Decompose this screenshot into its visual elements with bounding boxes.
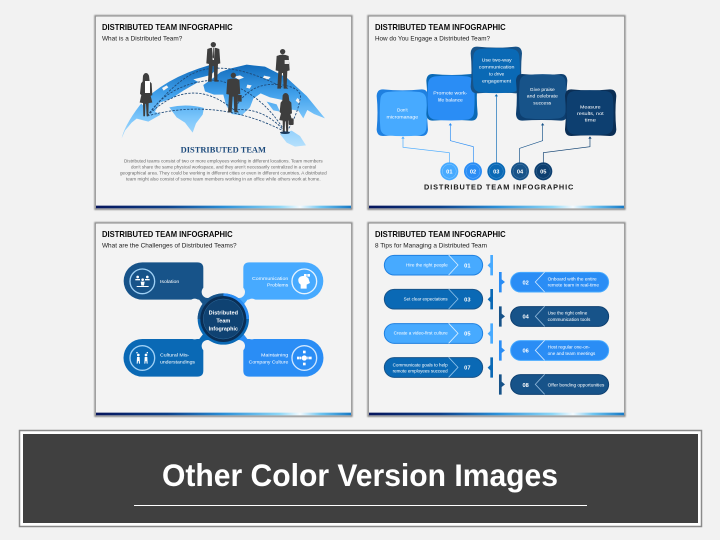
tip 08 bbox=[499, 374, 609, 395]
tip 05: Create a video-first culture bbox=[394, 331, 448, 336]
card 2: Promote work- bbox=[433, 90, 468, 95]
tip 07: remote employees succeed bbox=[393, 369, 448, 374]
bottom label: DISTRIBUTED TEAM INFOGRAPHIC bbox=[424, 183, 574, 192]
card 3: to drive bbox=[489, 71, 505, 76]
tip 03: Set clear expectations bbox=[404, 297, 448, 302]
card 2 bbox=[426, 74, 478, 121]
tip 06: one and team meetings bbox=[548, 351, 596, 356]
dashed connection arcs bbox=[147, 68, 300, 132]
tip 01: Hire the right people bbox=[406, 263, 448, 268]
card 4: and celebrate bbox=[527, 94, 558, 99]
centre hub bbox=[198, 293, 249, 345]
petal: maintaining company culture: Company Culture bbox=[249, 359, 289, 364]
tip 04: Use the right online bbox=[548, 311, 588, 316]
card 3: Use two-way bbox=[482, 58, 512, 63]
tip 06 bbox=[499, 340, 609, 361]
card 5: Measure bbox=[580, 104, 601, 109]
subheading: How do You Engage a Distributed Team? bbox=[375, 36, 490, 43]
description text: don't share the same physical workspace, and they aren't necessarily centralized in a central bbox=[131, 165, 316, 170]
banner: other color version images: Other Color Version Images bbox=[162, 457, 558, 493]
petal: isolation bbox=[124, 262, 227, 325]
tip 04: communication tools bbox=[548, 317, 591, 322]
tip 05: 05 bbox=[464, 332, 470, 338]
card 3 bbox=[471, 47, 522, 93]
number badges: 03 bbox=[493, 169, 499, 175]
petal: communication problems bbox=[220, 262, 323, 325]
tip 07: 07 bbox=[464, 366, 470, 372]
panel: how do you engage bbox=[368, 16, 625, 209]
tip 02: remote team in real-time bbox=[548, 283, 599, 288]
panel: challenges bbox=[95, 223, 352, 416]
card 2: life balance bbox=[438, 97, 463, 102]
heading: DISTRIBUTED TEAM INFOGRAPHIC bbox=[102, 22, 233, 32]
tip 08: Offer bonding opportunities bbox=[548, 382, 605, 387]
number badges bbox=[440, 162, 552, 180]
banner: other color version images bbox=[20, 430, 702, 526]
card 5 bbox=[565, 89, 616, 136]
petal: maintaining company culture: Maintaining bbox=[261, 353, 289, 358]
heading: DISTRIBUTED TEAM INFOGRAPHIC bbox=[375, 229, 506, 239]
subheading: What is a Distributed Team? bbox=[102, 36, 183, 43]
description text: geographical area. They could be working in different cities or even in different countries. A distributed bbox=[120, 171, 327, 176]
tip 02: 02 bbox=[523, 280, 529, 286]
number badges: 05 bbox=[540, 169, 546, 175]
number badges: 04 bbox=[517, 169, 524, 175]
description text bbox=[120, 159, 327, 182]
tip 06: 06 bbox=[523, 349, 529, 355]
petal: isolation: Isolation bbox=[160, 279, 180, 284]
heading: DISTRIBUTED TEAM INFOGRAPHIC bbox=[102, 229, 233, 239]
subheading: What are the Challenges of Distributed Teams? bbox=[102, 243, 237, 250]
panel: what is a distributed team bbox=[95, 16, 352, 209]
tip 07 bbox=[384, 357, 493, 378]
tip 04 bbox=[499, 306, 609, 327]
number badges: 02 bbox=[470, 169, 476, 175]
petal: cultural misunderstandings bbox=[123, 315, 227, 377]
tip 05 bbox=[384, 323, 493, 344]
centre hub: Team bbox=[216, 318, 230, 324]
card 1: micromanage bbox=[386, 115, 419, 120]
tip 03: 03 bbox=[464, 297, 470, 303]
card 1 bbox=[377, 89, 428, 136]
tip 06: Host regular one-on- bbox=[548, 345, 590, 350]
card 4: Give praise bbox=[530, 87, 555, 92]
description text: team might also consist of some team members working in an office while others work at home. bbox=[126, 177, 321, 182]
card 3: communication bbox=[479, 65, 515, 70]
petal: communication problems: Communication bbox=[252, 276, 289, 281]
card 4 bbox=[516, 74, 567, 121]
puzzle notches bbox=[189, 286, 258, 352]
subheading: 8 Tips for Managing a Distributed Team bbox=[375, 243, 487, 250]
heading: DISTRIBUTED TEAM INFOGRAPHIC bbox=[375, 22, 506, 32]
number badges: 01 bbox=[446, 169, 452, 175]
tip 02 bbox=[499, 272, 609, 292]
centre hub: Distributed bbox=[209, 311, 239, 317]
panel: 8 tips bbox=[368, 223, 625, 416]
tip 01: 01 bbox=[464, 263, 470, 269]
tip 03 bbox=[384, 289, 493, 309]
card 5: time bbox=[585, 118, 597, 123]
tip 07: Communicate goals to help bbox=[393, 362, 448, 367]
centre hub: Infographic bbox=[209, 326, 238, 332]
tip 02: Onboard with the entire bbox=[548, 277, 597, 282]
card 4: success bbox=[533, 101, 552, 106]
petal: maintaining company culture bbox=[220, 315, 323, 377]
tip 04: 04 bbox=[523, 315, 530, 321]
card 1: Don't bbox=[397, 108, 408, 113]
card 5: results, not bbox=[577, 111, 604, 116]
connector lines bbox=[401, 94, 592, 163]
tip 08: 08 bbox=[523, 383, 529, 389]
petal: communication problems: Problems bbox=[267, 283, 289, 288]
people silhouettes bbox=[140, 42, 294, 134]
petal: cultural misunderstandings: understandings bbox=[160, 359, 196, 364]
description text: Distributed teams consist of two or more employees working in different locations. Team members bbox=[124, 159, 323, 164]
card 3: engagement bbox=[482, 78, 512, 83]
globe map bbox=[122, 65, 325, 147]
tip 01 bbox=[384, 255, 493, 275]
diagram title: DISTRIBUTED TEAM bbox=[181, 145, 266, 154]
petal: cultural misunderstandings: Cultural Mis- bbox=[160, 353, 190, 358]
